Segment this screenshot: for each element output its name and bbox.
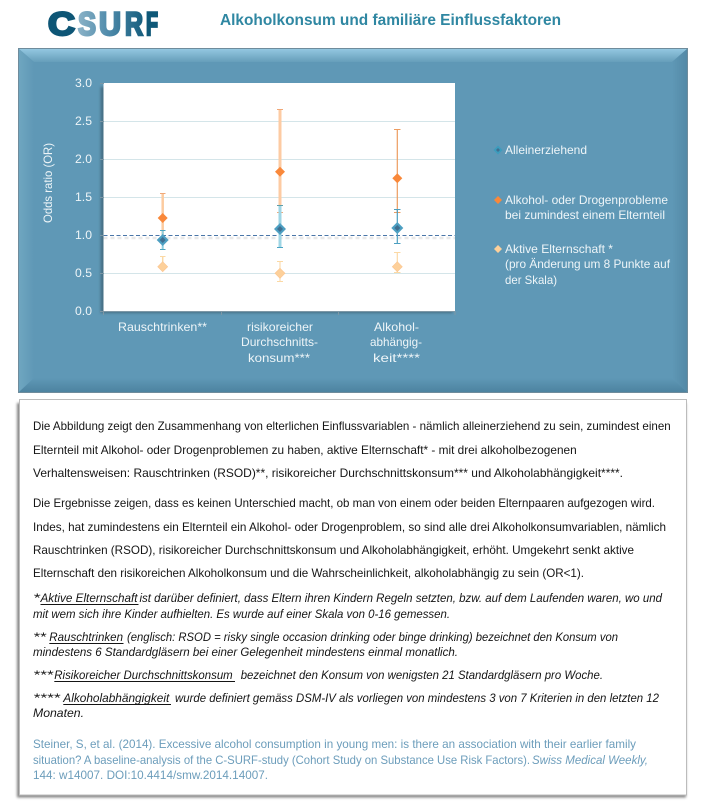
citation: 144: w14007. DOI:10.4414/smw.2014.14007. — [33, 768, 268, 782]
footnote: Risikoreicher Durchschnittskonsum: bezeichnet den Konsum von wenigsten 21 Standardgläsern pro Woche. — [241, 668, 603, 682]
footnote: Rauschtrinken: (englisch: RSOD = risky single occasion drinking oder binge drinking) bezeichnet den Konsum von — [127, 630, 618, 644]
text: results: Elternschaft den risikoreichen Alkoholkonsum und die Wahrscheinlichkeit, alkoholabhängig zu sein (OR<1). — [33, 566, 584, 580]
footnote: Rauschtrinken: Rauschtrinken — [49, 630, 123, 644]
legend item: Alkohol- oder Drogenprobleme — [494, 193, 668, 222]
footnote: Aktive Elternschaft: Aktive Elternschaft — [40, 591, 138, 605]
panel background with bevel — [18, 48, 688, 393]
footnote: Risikoreicher Durchschnittskonsum: *** — [33, 668, 54, 682]
footnote: Aktive Elternschaft: ist darüber definiert, dass Eltern ihren Kindern Regeln setzten, bzw. auf dem Laufenden waren, wo und — [140, 591, 662, 605]
text: results: Die Ergebnisse zeigen, dass es keinen Unterschied macht, ob man von einem oder beiden Elternpaaren aufgezogen wird. — [33, 496, 655, 510]
citation: Swiss Medical Weekly, — [532, 753, 648, 767]
y axis labels: 0.5 — [75, 266, 92, 280]
logo: C-SURF: S — [78, 6, 96, 42]
legend item: Aktive Elternschaft: der Skala) — [505, 273, 557, 287]
text: introduction: Die Abbildung zeigt den Zusammenhang von elterlichen Einflussvariablen - nämlich alleinerziehend zu sein, zumindest einen — [33, 419, 671, 433]
y axis ticks — [100, 84, 455, 315]
y axis labels: 1.0 — [75, 228, 92, 242]
x axis labels: Rauschtrinken** — [118, 320, 207, 334]
y axis title: Odds ratio (OR) — [41, 143, 55, 223]
footnote: Aktive Elternschaft: * — [33, 591, 41, 605]
footnote: Risikoreicher Durchschnittskonsum — [33, 668, 603, 682]
x axis labels: konsum*** — [248, 351, 310, 365]
legend item: Alleinerziehend: Alleinerziehend — [505, 143, 587, 157]
footnote: Alkoholabhängigkeit: wurde definiert gemäss DSM-IV als vorliegen von mindestens 3 von 7 Kriterien in den letzten 12 — [175, 691, 659, 705]
footnote: Aktive Elternschaft: mit wem sich ihre Kinder aufhielten. Es wurde auf einer Skala von 0-16 gemessen. — [33, 607, 450, 621]
citation: Steiner, S, et al. (2014). Excessive alcohol consumption in young men: is there an association with their earlier family — [33, 737, 636, 751]
x axis labels — [118, 320, 422, 365]
text: results: Rauschtrinken (RSOD), risikoreicher Durchschnittskonsum und Alkoholabhängigkeit, erhöht. Umgekehrt senkt aktive — [33, 543, 634, 557]
footnote: Rauschtrinken: mindestens 6 Standardgläsern bei einer Gelegenheit mindestens einmal monatlich. — [33, 645, 458, 659]
logo: C-SURF: F — [146, 6, 158, 42]
legend item: Aktive Elternschaft: (pro Änderung um 8 Punkte auf — [505, 257, 671, 271]
x axis labels: Durchschnitts- — [241, 335, 318, 349]
text: introduction: Elternteil mit Alkohol- oder Drogenproblemen zu haben, aktive Elternschaft* - mit drei alkoholbezogenen — [33, 443, 577, 457]
y axis labels — [75, 76, 92, 318]
logo: C-SURF — [48, 6, 158, 42]
x axis labels: risikoreicher — [247, 320, 313, 334]
footnote: Alkoholabhängigkeit: **** — [33, 691, 61, 705]
text: introduction — [33, 419, 671, 480]
logo: C-SURF: C — [48, 6, 75, 42]
legend item: Alkohol- oder Drogenprobleme: bei zumindest einem Elternteil — [505, 208, 665, 222]
footnote: Rauschtrinken: ** — [33, 630, 47, 644]
citation: situation? A baseline-analysis of the C-SURF-study (Cohort Study on Substance Use Risk Factors). — [33, 753, 530, 767]
legend — [494, 143, 671, 287]
footnote: Risikoreicher Durchschnittskonsum: Risikoreicher Durchschnittskonsum — [54, 668, 233, 682]
text: results — [33, 496, 666, 580]
logo: C-SURF: U — [99, 6, 121, 42]
footnote: Alkoholabhängigkeit — [33, 691, 659, 720]
plot area — [100, 83, 455, 313]
citation — [33, 737, 648, 782]
legend item: Aktive Elternschaft: Aktive Elternschaft * — [505, 242, 613, 256]
data: Rauschtrinken — [157, 194, 169, 272]
x axis labels: keit**** — [373, 351, 420, 365]
x axis labels: Alkohol- — [374, 320, 419, 334]
footnote: Alkoholabhängigkeit: Monaten. — [33, 706, 84, 720]
x axis labels: abhängig- — [370, 335, 422, 349]
title: Alkoholkonsum und familiäre Einflussfaktoren — [220, 12, 561, 29]
text: introduction: Verhaltensweisen: Rauschtrinken (RSOD)**, risikoreicher Durchschnittskonsum*** und Alkoholabhängigkeit****. — [33, 466, 623, 480]
text: results: Indes, hat zumindestens ein Elternteil ein Alkohol- oder Drogenproblem, so sind alle drei Alkoholkonsumvariablen, nämlich — [33, 520, 666, 534]
footnote: Rauschtrinken — [33, 630, 618, 659]
footnote: Alkoholabhängigkeit: Alkoholabhängigkeit — [62, 691, 170, 705]
y axis labels: 2.5 — [75, 114, 92, 128]
legend item: Aktive Elternschaft — [494, 242, 671, 287]
box background — [17, 400, 686, 798]
panel: chart — [18, 48, 688, 393]
y axis labels: 2.0 — [75, 152, 92, 166]
y axis labels: 1.5 — [75, 190, 92, 204]
footnote: Aktive Elternschaft — [33, 591, 662, 621]
legend item: Alkohol- oder Drogenprobleme: Alkohol- oder Drogenprobleme — [505, 193, 668, 207]
y axis labels: 0.0 — [75, 304, 92, 318]
y axis labels: 3.0 — [75, 76, 92, 90]
data: Alkoholabhängigkeit — [391, 130, 403, 272]
data: risikoreicher Durchschnittskonsum — [274, 110, 286, 282]
panel: text box — [17, 400, 686, 798]
logo: C-SURF: R — [125, 6, 143, 42]
